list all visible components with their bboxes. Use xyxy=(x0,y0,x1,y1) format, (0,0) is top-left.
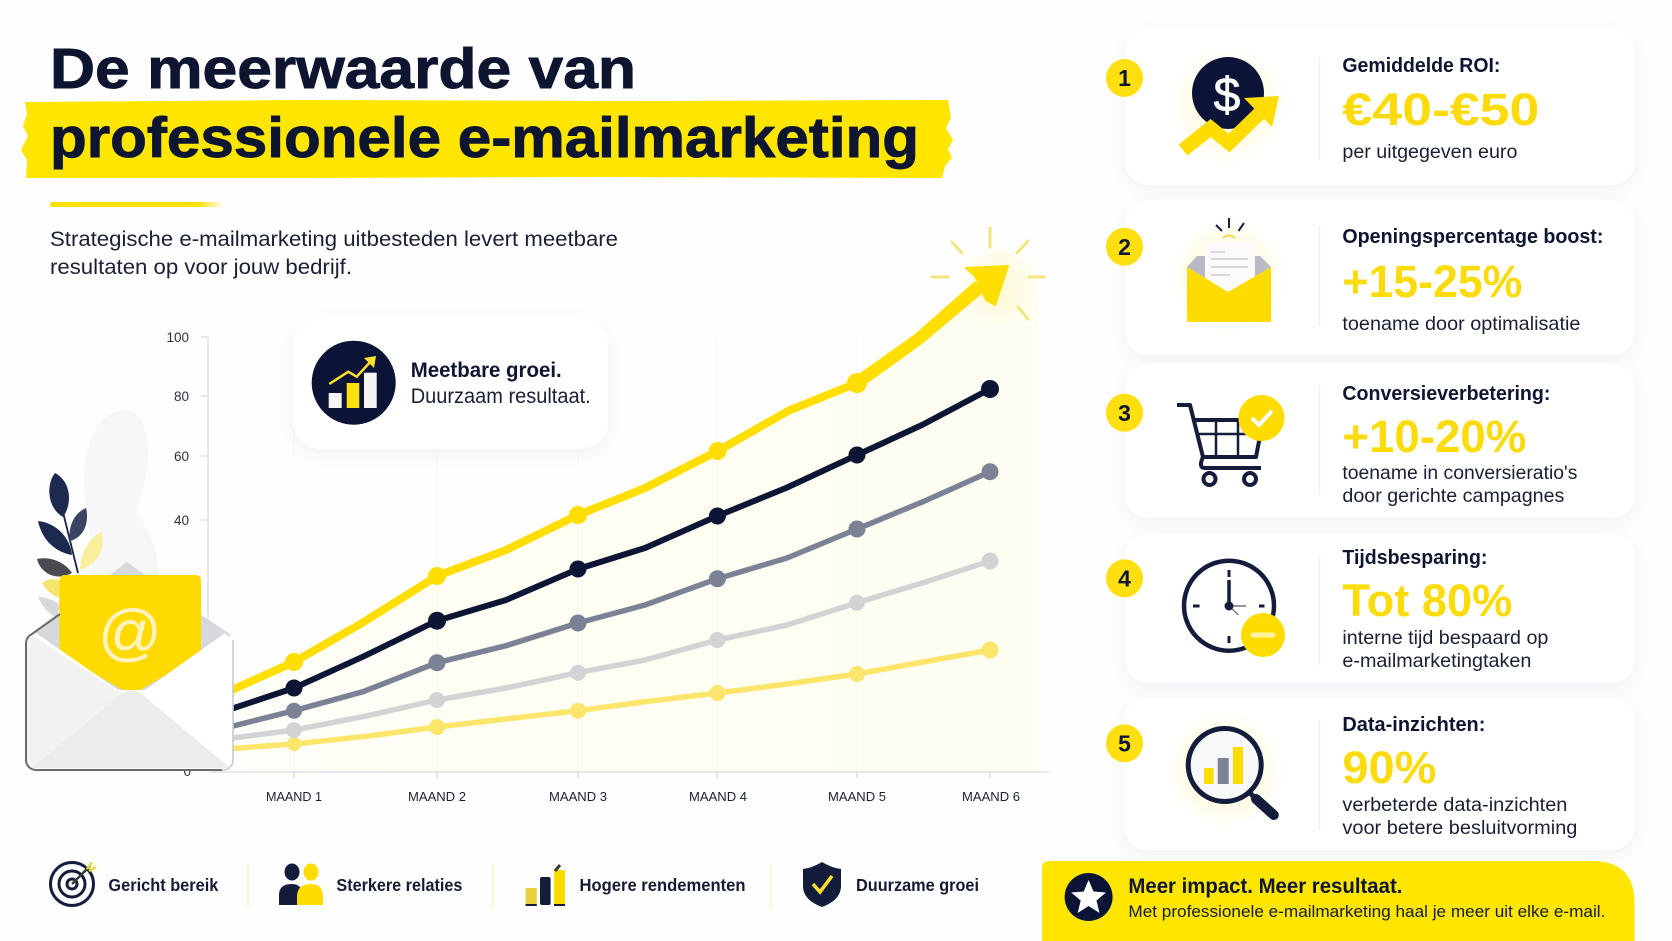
benefit: duurzame groei: Duurzame groei xyxy=(856,875,979,895)
benefit: sterkere relaties: Sterkere relaties xyxy=(336,875,463,895)
card 1: ROI xyxy=(1106,28,1635,185)
card 1 text xyxy=(1342,55,1539,163)
subtitle: Strategische e-mailmarketing uitbesteden levert meetbare xyxy=(50,227,618,251)
title line 2: professionele e-mailmarketing xyxy=(50,106,919,170)
badge 3: 3 xyxy=(1118,400,1131,426)
card 4 text: interne tijd bespaard op xyxy=(1342,627,1549,649)
banner text: Meer impact. Meer resultaat. xyxy=(1128,875,1402,898)
card 4 text: Tot 80% xyxy=(1342,575,1512,626)
divider xyxy=(1318,226,1320,326)
growth chart xyxy=(166,228,1049,804)
divider xyxy=(1318,555,1320,665)
badge 5: 5 xyxy=(1118,730,1131,756)
chart area fill xyxy=(235,285,1038,772)
illustration: envelope with leaves xyxy=(26,410,233,770)
benefit: duurzame groei xyxy=(803,862,979,907)
callout text: Duurzaam resultaat. xyxy=(411,385,591,408)
title xyxy=(21,37,953,178)
highlight glow xyxy=(956,241,1044,329)
banner: meer impact xyxy=(1042,861,1634,941)
yellow card xyxy=(59,575,201,695)
card 4: time saving xyxy=(1106,533,1635,683)
banner text xyxy=(1128,875,1605,921)
envelope back xyxy=(30,562,230,690)
title line 1: De meerwaarde van xyxy=(50,37,636,101)
card 2 text xyxy=(1342,226,1603,335)
callout card xyxy=(293,317,608,449)
title underline xyxy=(50,202,224,207)
card 4 text: Tijdsbesparing: xyxy=(1342,547,1487,569)
grey series xyxy=(225,463,998,728)
card 4 text xyxy=(1342,547,1549,672)
y axis: 0 xyxy=(183,764,191,779)
envelope body xyxy=(26,614,233,770)
person silhouette xyxy=(84,410,158,575)
card 1 text: €40-€50 xyxy=(1342,84,1539,135)
card 5: data insights xyxy=(1106,697,1635,850)
icon: people xyxy=(279,864,323,905)
card 4 text: e-mailmarketingtaken xyxy=(1342,650,1531,672)
icon: open envelope xyxy=(1168,215,1288,335)
card 3 text: toename in conversieratio's xyxy=(1342,462,1578,484)
light grey series xyxy=(225,552,998,739)
benefit: gericht bereik: Gericht bereik xyxy=(108,875,219,895)
subtitle xyxy=(50,227,618,279)
y axis: 100 xyxy=(166,330,189,345)
x axis: MAAND 2 xyxy=(408,789,466,804)
divider xyxy=(248,863,771,908)
month gridlines xyxy=(294,337,990,772)
benefits row xyxy=(50,862,979,908)
card 5 text: 90% xyxy=(1342,742,1436,793)
x axis: MAAND 3 xyxy=(549,789,607,804)
card 2 text: +15-25% xyxy=(1342,256,1522,307)
card 3 text xyxy=(1342,383,1578,507)
badge 2 xyxy=(1106,228,1143,266)
banner text: Met professionele e-mailmarketing haal je meer uit elke e-mail. xyxy=(1128,902,1605,921)
badge 5 xyxy=(1106,724,1143,762)
icon: dollar with arrow xyxy=(1166,43,1290,167)
card 3 text: Conversieverbetering: xyxy=(1342,383,1550,405)
benefit: hogere rendementen: Hogere rendementen xyxy=(580,875,746,895)
icon: target xyxy=(50,862,96,906)
title highlight brush xyxy=(21,100,953,178)
badge 1: 1 xyxy=(1118,65,1131,91)
card 3 text: +10-20% xyxy=(1342,411,1526,462)
callout text: Meetbare groei. xyxy=(411,359,562,382)
card 3: conversion xyxy=(1106,363,1635,518)
navy series xyxy=(225,380,999,711)
y axis xyxy=(166,330,208,779)
callout: meetbare groei xyxy=(293,317,608,449)
benefit: hogere rendementen xyxy=(526,865,746,905)
x axis: MAAND 6 xyxy=(962,789,1020,804)
badge 2: 2 xyxy=(1118,234,1131,260)
card 5 text: verbeterde data-inzichten xyxy=(1342,794,1567,816)
card 5 text: Data-inzichten: xyxy=(1342,714,1485,736)
card 5 text xyxy=(1342,714,1577,839)
divider xyxy=(1318,385,1320,495)
callout text xyxy=(411,359,591,408)
y axis: 40 xyxy=(174,513,189,528)
badge 4: 4 xyxy=(1118,566,1131,592)
x axis: MAAND 4 xyxy=(689,789,747,804)
badge 4 xyxy=(1106,559,1143,597)
x axis: MAAND 5 xyxy=(828,789,886,804)
x axis: MAAND 1 xyxy=(266,789,322,804)
icon: star xyxy=(1065,873,1113,921)
icon: magnifier xyxy=(1163,708,1287,832)
badge 1 xyxy=(1106,59,1143,97)
icon: clock xyxy=(1184,561,1285,657)
card 2: opening rate xyxy=(1106,200,1635,355)
pale yellow series xyxy=(225,642,998,751)
yellow series with arrow xyxy=(225,266,1008,693)
y axis: 60 xyxy=(174,449,189,464)
arrow sparkle rays xyxy=(932,228,1044,319)
divider xyxy=(1318,720,1320,830)
benefit: sterkere relaties xyxy=(279,864,463,905)
icon: cart with check xyxy=(1177,395,1284,485)
icon: rising bars xyxy=(526,865,565,905)
icon: shield xyxy=(803,862,841,907)
badge 3 xyxy=(1106,394,1143,432)
subtitle: resultaten op voor jouw bedrijf. xyxy=(50,255,352,279)
card 1 text: Gemiddelde ROI: xyxy=(1342,55,1500,77)
icon: growth bars xyxy=(312,341,396,425)
card 1 text: per uitgegeven euro xyxy=(1342,141,1518,163)
leaves xyxy=(37,473,103,618)
benefit: gericht bereik xyxy=(50,862,219,906)
y axis: 80 xyxy=(174,389,189,404)
card 5 text: voor betere besluitvorming xyxy=(1342,817,1577,839)
divider xyxy=(1318,57,1320,160)
icon: dollar with arrow: $ xyxy=(1214,69,1240,122)
card 3 text: door gerichte campagnes xyxy=(1342,485,1565,507)
card 2 text: toename door optimalisatie xyxy=(1342,313,1580,335)
card 2 text: Openingspercentage boost: xyxy=(1342,226,1603,248)
at sign: @ xyxy=(98,598,162,668)
x axis xyxy=(210,772,1049,804)
